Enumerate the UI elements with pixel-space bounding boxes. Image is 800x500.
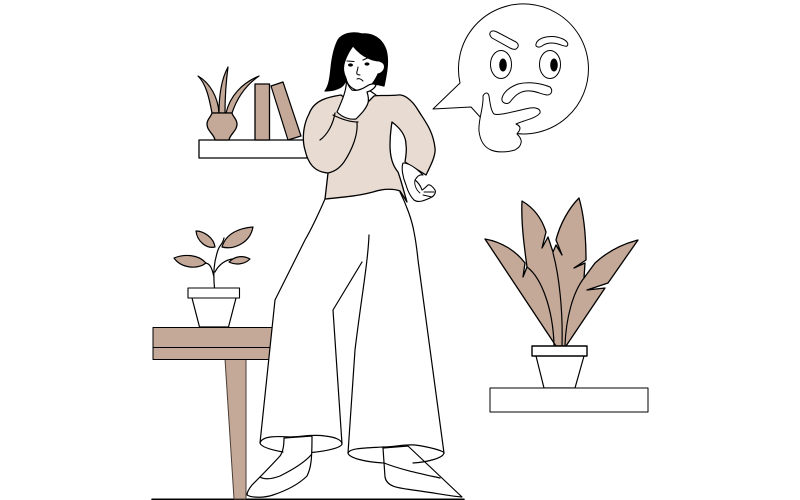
- left shoe: [247, 436, 312, 497]
- sweater: [303, 95, 435, 202]
- icon: shelf plant leaves: [198, 67, 259, 113]
- plant pot: [192, 298, 236, 327]
- nose and mouth: [357, 67, 363, 81]
- chin hand: [337, 79, 376, 119]
- floor plant on shelf: [485, 198, 648, 412]
- shelf: [490, 388, 648, 412]
- wall shelf with plant and books: [198, 67, 307, 158]
- frowning mouth: [502, 83, 552, 103]
- plant leaves: [485, 198, 638, 346]
- plant stem: [203, 238, 232, 288]
- icon: vase: [207, 113, 237, 140]
- ground line: [152, 498, 464, 500]
- plant pot: [536, 356, 584, 388]
- right hand on hip: [402, 163, 435, 201]
- trouser hems: [260, 435, 342, 452]
- trousers: [260, 192, 444, 463]
- bubble outline: [433, 4, 588, 134]
- right brow: [536, 37, 568, 47]
- thumb hand: [479, 93, 540, 152]
- plant leaves: [174, 227, 253, 267]
- table: [153, 328, 275, 499]
- right eye: [540, 50, 560, 78]
- leaf veins: [527, 253, 584, 345]
- icon: upright book: [255, 84, 270, 140]
- neck collar: [366, 88, 376, 108]
- left eye: [490, 50, 512, 78]
- woman: [247, 33, 462, 497]
- fingers: [415, 180, 434, 197]
- thought bubble: [433, 4, 588, 152]
- right shoe: [383, 446, 462, 497]
- sleeve details: [320, 113, 357, 173]
- face: [344, 46, 380, 90]
- brows and eyes: [347, 56, 372, 62]
- cuff: [333, 115, 358, 122]
- table plant: [174, 227, 253, 327]
- icon: leaning book: [271, 82, 301, 140]
- hair: [325, 33, 387, 91]
- ear: [375, 62, 384, 73]
- left brow: [490, 31, 518, 49]
